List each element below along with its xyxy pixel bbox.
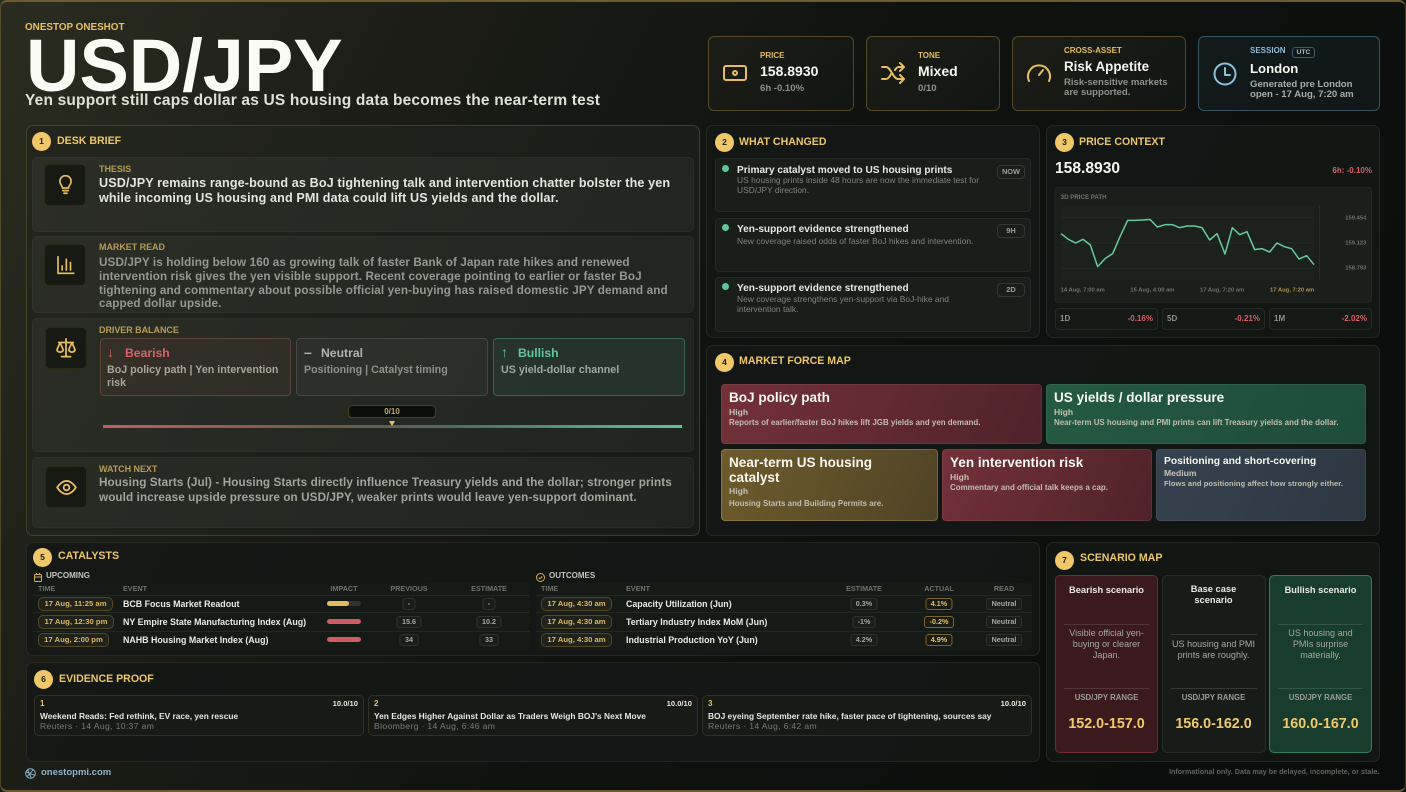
UTC pill: [1292, 47, 1315, 58]
stat value: -2.02%: [1342, 314, 1367, 323]
balance bar: [103, 425, 682, 428]
tile weight: High: [729, 486, 748, 496]
scenario text: US housing and: [1288, 628, 1353, 638]
badge 6: [34, 670, 53, 689]
card: bullish: [493, 338, 685, 396]
bearish drivers: BoJ policy path | Yen intervention: [107, 364, 278, 376]
heading: CATALYSTS: [58, 550, 119, 562]
block: driver balance: [32, 318, 694, 452]
headline: Weekend Reads: Fed rethink, EV race, yen rescue: [40, 711, 238, 721]
scenario text: prints are roughly.: [1178, 650, 1249, 660]
badge 2: 2: [722, 137, 727, 147]
item description: New coverage raised odds of faster BoJ hikes and intervention.: [737, 236, 973, 246]
price chart: 158.793: [1345, 266, 1367, 272]
cross-asset note: Risk-sensitive markets: [1064, 77, 1168, 88]
header row: TIME: [541, 584, 558, 593]
row 2: 17 Aug, 12:30 pm: [45, 617, 107, 626]
rank: 3: [708, 699, 712, 708]
time pill: NOW: [1002, 167, 1020, 176]
row 2: -1%: [858, 617, 870, 626]
session note: [1250, 79, 1354, 100]
tile title: Positioning and short-covering: [1164, 456, 1316, 467]
heading: EVIDENCE PROOF: [59, 673, 154, 685]
price chart: 3D PRICE PATH: [1061, 194, 1107, 201]
tile title: Near-term US housing: [729, 455, 872, 470]
header row: EVENT: [123, 584, 147, 593]
tile title: BoJ policy path: [729, 390, 830, 405]
session label: SESSION: [1250, 46, 1286, 55]
stat label: 5D: [1167, 314, 1177, 323]
stat value: -0.16%: [1128, 314, 1153, 323]
bullish drivers: US yield-dollar channel: [501, 364, 619, 376]
panel: price context: [1046, 125, 1380, 338]
bullish title: Bullish: [518, 346, 559, 360]
item description: [737, 175, 979, 194]
stat label: 1D: [1060, 314, 1070, 323]
header row: TIME: [38, 584, 55, 593]
range value: 156.0-162.0: [1175, 716, 1252, 732]
bearish title: Bearish: [125, 346, 170, 360]
row 1: Capacity Utilization (Jun): [626, 599, 732, 609]
price chart: 159.454: [1345, 216, 1367, 222]
source: Bloomberg · 14 Aug, 6:46 am: [374, 721, 495, 731]
row 1: 0.3%: [856, 599, 872, 608]
header row: EVENT: [626, 584, 650, 593]
panel: market force map: [706, 345, 1380, 536]
panel: catalysts: [26, 542, 1040, 656]
scenario text: [1288, 628, 1353, 660]
row 3: NAHB Housing Market Index (Aug): [123, 635, 268, 645]
heading: SCENARIO MAP: [1080, 552, 1162, 564]
row 2: 15.6: [402, 617, 416, 626]
badge 2: [715, 133, 734, 152]
price chart: 17 Aug, 7:20 am: [1270, 287, 1314, 293]
tile text: Near-term US housing and PMI prints can lift Treasury yields and the dollar.: [1054, 418, 1338, 427]
text: [99, 176, 670, 204]
price label: PRICE: [760, 51, 784, 60]
tile text: Reports of earlier/faster BoJ hikes lift JGB yields and yen demand.: [729, 418, 980, 427]
row 2: Tertiary Industry Index MoM (Jun): [626, 617, 767, 627]
row 3: [541, 633, 1022, 647]
panel: evidence proof: [26, 662, 1040, 762]
scenario text: Visible official yen-: [1069, 628, 1144, 638]
change item 3: [715, 277, 1031, 332]
scenario text: PMIs surprise: [1293, 639, 1348, 649]
header row: PREVIOUS: [390, 584, 428, 593]
status dot: [722, 283, 729, 290]
row 1: 17 Aug, 4:30 am: [547, 599, 606, 608]
outcomes label: OUTCOMES: [549, 571, 595, 580]
change item 2: [715, 218, 1031, 272]
range label: USD/JPY RANGE: [1182, 693, 1245, 702]
panel: what changed: [706, 125, 1040, 338]
session note: open - 17 Aug, 7:20 am: [1250, 89, 1354, 100]
badge 1: [32, 132, 51, 151]
tile weight: High: [729, 407, 748, 417]
table: outcomes: [536, 583, 1032, 650]
block: market read: [32, 236, 694, 313]
price chart: [1054, 187, 1372, 302]
score: 10.0/10: [333, 699, 358, 708]
panel: scenario map: [1046, 542, 1380, 762]
change item 1: [715, 158, 1031, 212]
row 3: 17 Aug, 4:30 am: [547, 635, 606, 644]
subtitle: Yen support still caps dollar as US housing data becomes the near-term test: [25, 92, 600, 109]
item description: intervention talk.: [737, 304, 798, 314]
item title: Yen-support evidence strengthened: [737, 283, 909, 294]
icon: light bulb: [44, 164, 86, 206]
score: 10.0/10: [1001, 699, 1026, 708]
item title: Primary catalyst moved to US housing prints: [737, 165, 952, 176]
tile: intervention: [942, 449, 1152, 521]
heading: WHAT CHANGED: [739, 136, 826, 148]
row 1: [38, 597, 496, 611]
range value: 160.0-167.0: [1282, 716, 1359, 732]
text: capped dollar upside.: [99, 297, 221, 310]
evidence card 3: [702, 695, 1032, 736]
label: WATCH NEXT: [99, 464, 157, 474]
header row: READ: [994, 584, 1014, 593]
row 2: NY Empire State Manufacturing Index (Aug): [123, 617, 306, 627]
row 3: Neutral: [992, 635, 1016, 644]
status dot: [722, 165, 729, 172]
source: Reuters · 14 Aug, 6:42 am: [708, 721, 817, 731]
row 2: 10.2: [482, 617, 496, 626]
time pill: 9H: [1006, 226, 1016, 235]
scenario title: Base case: [1191, 584, 1236, 594]
row 1: -: [408, 599, 410, 608]
title block: [25, 22, 600, 109]
row 1: [541, 597, 1022, 611]
text: [99, 256, 668, 310]
tile: US yields: [1046, 384, 1366, 444]
range label: USD/JPY RANGE: [1075, 693, 1138, 702]
price chart: 159.123: [1345, 241, 1367, 247]
neutral drivers: Positioning | Catalyst timing: [304, 364, 448, 376]
scenario text: materially.: [1300, 650, 1341, 660]
tile weight: Medium: [1164, 468, 1196, 478]
icon: clock: [1214, 62, 1236, 86]
main title: USD/JPY: [26, 24, 343, 107]
heading: PRICE CONTEXT: [1079, 136, 1165, 148]
row 2: Neutral: [992, 617, 1016, 626]
row 2: 17 Aug, 4:30 am: [547, 617, 606, 626]
badge 7: [1055, 551, 1074, 570]
tone label: TONE: [918, 51, 940, 60]
badge 5: 5: [40, 552, 45, 562]
cross-asset note: are supported.: [1064, 87, 1130, 98]
stat 5D: [1162, 308, 1265, 330]
row 3: 4.9%: [931, 635, 947, 644]
tile: positioning: [1156, 449, 1366, 521]
item description: [737, 294, 949, 314]
stat 1M: [1269, 308, 1372, 330]
tile title: US yields / dollar pressure: [1054, 390, 1224, 405]
scenario: bullish: [1269, 575, 1372, 753]
cross-asset value: Risk Appetite: [1064, 59, 1149, 74]
text: would increase upside pressure on USD/JPY, weaker prints would leave yen-support dominant.: [99, 490, 637, 504]
header row: ESTIMATE: [846, 584, 882, 593]
evidence card 1: [34, 695, 364, 736]
scenario text: buying or clearer: [1073, 639, 1140, 649]
badge 7: 7: [1062, 555, 1067, 565]
headline: BOJ eyeing September rate hike, faster pace of tightening, sources say: [708, 711, 991, 721]
neutral title: –: [304, 344, 312, 360]
text: intervention risk gives the yen visible support. Recent coverage pointing to earlier or faster BoJ: [99, 270, 642, 283]
row 1: 17 Aug, 11:25 am: [44, 599, 107, 608]
bar marker: [389, 421, 395, 426]
KPI: price: [708, 36, 854, 111]
badge 4: 4: [722, 357, 727, 367]
scenario: base case: [1162, 575, 1266, 753]
bearish title: [107, 344, 170, 360]
bullish title: [501, 344, 559, 360]
badge 4: [715, 353, 734, 372]
icon: gauge: [1026, 64, 1052, 82]
label: DRIVER BALANCE: [99, 325, 179, 335]
rank: 1: [40, 699, 44, 708]
KPI: tone: [866, 36, 1000, 111]
tone value: Mixed: [918, 63, 958, 79]
icon: shuffle: [881, 62, 905, 84]
badge 3: 3: [1062, 137, 1067, 147]
scenario text: [1172, 639, 1255, 660]
tile: BoJ policy path: [721, 384, 1042, 444]
row 1: 4.1%: [931, 599, 947, 608]
icon: globe: [25, 768, 36, 779]
stat value: -0.21%: [1235, 314, 1260, 323]
scenario title: Bearish scenario: [1069, 585, 1144, 595]
table: upcoming: [33, 583, 530, 650]
row 2: [38, 615, 502, 629]
six hour change: 6h: -0.10%: [1332, 166, 1372, 175]
item description: New coverage strengthens yen-support via BoJ-hike and: [737, 294, 949, 304]
neutral title: [304, 344, 363, 360]
price value: 158.8930: [760, 63, 818, 79]
item description: USD/JPY direction.: [737, 184, 809, 194]
text: [99, 476, 672, 504]
heading: DESK BRIEF: [57, 135, 121, 147]
UTC pill: UTC: [1296, 49, 1310, 56]
icon: check circle: [536, 573, 545, 582]
tile text: Housing Starts and Building Permits are.: [729, 499, 883, 508]
icon: calendar: [34, 573, 42, 582]
footer disclaimer: Informational only. Data may be delayed, incomplete, or stale.: [1169, 767, 1379, 776]
upcoming label: UPCOMING: [46, 571, 90, 580]
heading: MARKET FORCE MAP: [739, 355, 851, 367]
scenario text: Japan.: [1093, 650, 1120, 660]
price chart: 14 Aug, 7:00 am: [1061, 287, 1105, 293]
time pill: [997, 224, 1025, 238]
bullish title: ↑: [501, 344, 508, 360]
icon: scales: [45, 327, 87, 369]
price: 158.8930: [1055, 160, 1120, 177]
tile: housing catalyst: [721, 449, 938, 521]
neutral title: Neutral: [321, 346, 363, 360]
icon: banknote: [723, 65, 747, 81]
row 3: 33: [485, 635, 493, 644]
row 1: -: [488, 599, 490, 608]
stat label: 1M: [1274, 314, 1285, 323]
range label: USD/JPY RANGE: [1289, 693, 1352, 702]
KPI: session: [1198, 36, 1380, 111]
icon: bar chart: [44, 244, 86, 286]
range value: 152.0-157.0: [1068, 716, 1145, 732]
tile text: Commentary and official talk keeps a cap.: [950, 483, 1108, 492]
header row: [541, 584, 1014, 593]
scenario title: Bullish scenario: [1285, 585, 1356, 595]
KPI: cross-asset: [1012, 36, 1186, 111]
score pill: [348, 405, 436, 418]
tile weight: High: [1054, 407, 1073, 417]
row 3: 17 Aug, 2:00 pm: [44, 635, 103, 644]
text: tightening and commentary about possible official yen-buying has raised domestic JPY demand and: [99, 284, 668, 297]
price chart: 15 Aug, 4:00 am: [1130, 287, 1175, 293]
cross-asset label: CROSS-ASSET: [1064, 46, 1122, 55]
row 3: Industrial Production YoY (Jun): [626, 635, 758, 645]
tile title: [729, 455, 872, 485]
evidence card 2: [368, 695, 698, 736]
site name: onestopmi.com: [41, 767, 111, 778]
rank: 2: [374, 699, 378, 708]
score: 10.0/10: [667, 699, 692, 708]
row 1: BCB Focus Market Readout: [123, 599, 239, 609]
tile title: catalyst: [729, 470, 779, 485]
row 1: Neutral: [992, 599, 1016, 608]
eyebrow: ONESTOP ONESHOT: [25, 22, 125, 32]
header row: ESTIMATE: [471, 584, 507, 593]
time pill: 2D: [1006, 285, 1016, 294]
time pill: [997, 283, 1025, 297]
panel: desk brief: [26, 125, 700, 536]
item description: US housing prints inside 48 hours are now the immediate test for: [737, 175, 979, 185]
session value: London: [1250, 61, 1298, 76]
price change: 6h -0.10%: [760, 83, 804, 94]
label: THESIS: [99, 164, 131, 174]
score pill: 0/10: [384, 407, 400, 416]
header row: IMPACT: [330, 584, 358, 593]
headline: Yen Edges Higher Against Dollar as Traders Weigh BOJ's Next Move: [374, 711, 646, 721]
bearish drivers: risk: [107, 376, 126, 388]
scenario: bearish: [1055, 575, 1158, 753]
text: Housing Starts (Jul) - Housing Starts directly influence Treasury yields and the dollar; stronger prints: [99, 476, 672, 489]
scenario title: [1191, 584, 1236, 604]
scenario title: scenario: [1194, 594, 1233, 604]
text: while incoming US housing and PMI data could lift US yields and the dollar.: [99, 190, 559, 204]
row 3: 34: [405, 635, 413, 644]
time pill: [997, 165, 1025, 179]
scenario text: [1069, 628, 1144, 660]
text: USD/JPY remains range-bound as BoJ tightening talk and intervention chatter bolster the yen: [99, 176, 670, 190]
tile title: Yen intervention risk: [950, 455, 1083, 470]
item title: Yen-support evidence strengthened: [737, 224, 909, 235]
row 3: [38, 633, 498, 647]
badge 1: 1: [39, 136, 44, 146]
header row: [38, 584, 507, 593]
badge 6: 6: [41, 674, 46, 684]
session note: Generated pre London: [1250, 79, 1352, 90]
tile text: Flows and positioning affect how strongly either.: [1164, 479, 1343, 488]
block: thesis: [32, 157, 694, 232]
cross-asset note: [1064, 77, 1168, 98]
row 3: 4.2%: [856, 635, 872, 644]
badge 5: [33, 548, 52, 567]
stat 1D: [1055, 308, 1158, 330]
tone score: 0/10: [918, 83, 937, 94]
scenario text: US housing and PMI: [1172, 639, 1255, 649]
source: Reuters · 14 Aug, 10:37 am: [40, 721, 154, 731]
header row: ACTUAL: [924, 584, 954, 593]
label: MARKET READ: [99, 242, 165, 252]
tile weight: High: [950, 472, 969, 482]
icon: eye: [45, 466, 87, 508]
card: bearish: [100, 338, 291, 396]
status dot: [722, 224, 729, 231]
card: neutral: [296, 338, 488, 396]
footer brand: [25, 767, 111, 779]
bearish drivers: [107, 364, 278, 388]
text: USD/JPY is holding below 160 as growing talk of faster Bank of Japan rate hikes and renewed: [99, 256, 630, 269]
row 2: -0.2%: [930, 617, 948, 626]
row 2: [541, 615, 1022, 629]
bearish title: ↓: [107, 344, 114, 360]
block: watch next: [32, 457, 694, 528]
badge 3: [1055, 133, 1074, 152]
price chart: 17 Aug, 7:20 am: [1200, 287, 1244, 293]
